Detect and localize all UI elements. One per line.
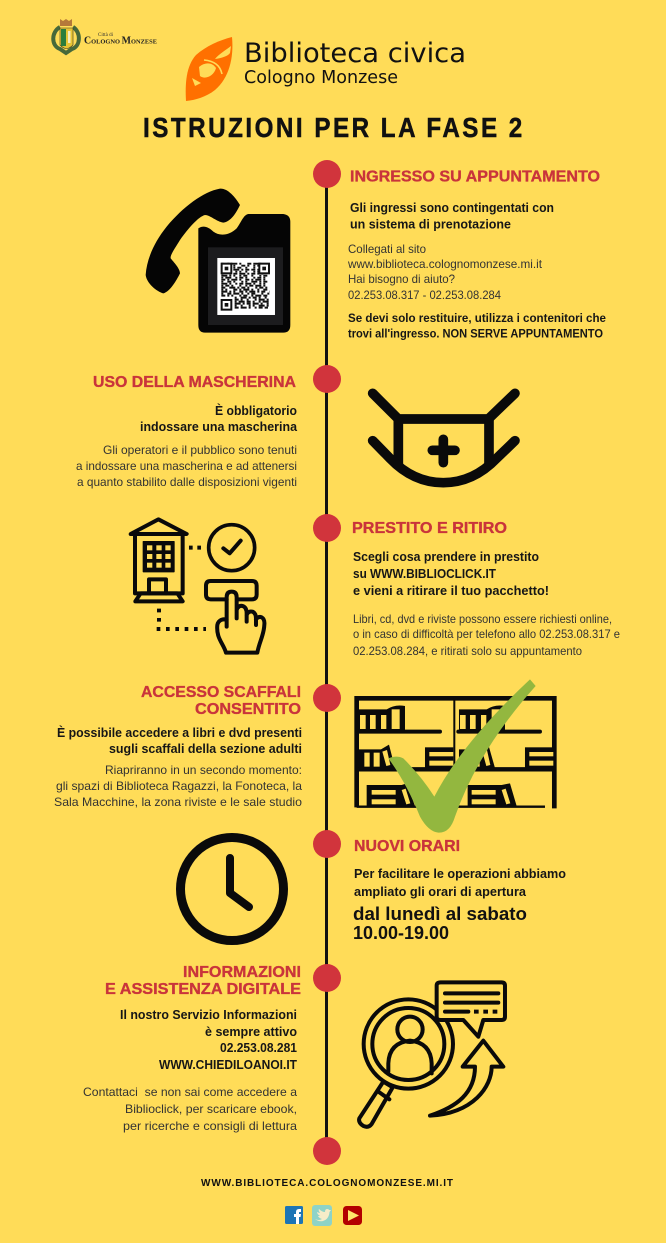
contacts: 02.253.08.317 - 02.253.08.284: [348, 288, 501, 302]
library location: Cologno Monzese: [244, 67, 398, 88]
contacts: Collegati al sito: [348, 242, 426, 256]
icon: orange leaf: [186, 37, 232, 101]
icon: youtube: [343, 1206, 362, 1225]
heading: ACCESSO SCAFFALI: [141, 684, 301, 701]
lead text: ampliato gli orari di apertura: [354, 885, 527, 899]
lead text: sugli scaffali della sezione adulti: [109, 742, 302, 756]
panel: informazioni e assistenza digitale: [83, 964, 301, 1133]
return note: [348, 313, 606, 340]
body text: 02.253.08.284, e ritirati solo su appuntamento: [353, 644, 582, 658]
icon: clock: [180, 838, 284, 940]
body text: [353, 612, 620, 658]
icon: face mask: [373, 393, 515, 483]
lead text: e vieni a ritirare il tuo pacchetto!: [353, 584, 549, 598]
body text: a indossare una mascherina e ad attenersi: [76, 459, 297, 473]
timeline: [313, 160, 341, 1165]
heading: PRESTITO E RITIRO: [352, 520, 507, 537]
lead text: [353, 550, 549, 598]
opening hours: [353, 904, 527, 943]
opening hours: 10.00-19.00: [353, 923, 449, 943]
body text: a quanto stabilito dalle disposizioni vigenti: [77, 475, 297, 489]
body text: Contattaci se non sai come accedere a: [83, 1085, 297, 1099]
body text: Riapriranno in un secondo momento:: [105, 763, 302, 777]
return note: trovi all'ingresso. NON SERVE APPUNTAMENTO: [348, 328, 603, 340]
contacts: www.biblioteca.colognomonzese.mi.it: [347, 257, 543, 271]
logo: Città di Cologno Monzese: [53, 19, 157, 53]
lead text: 02.253.08.281: [220, 1041, 297, 1055]
municipality name: Città di: [98, 33, 114, 38]
contacts: Hai bisogno di aiuto?: [348, 272, 455, 286]
lead text: WWW.CHIEDILOANOI.IT: [159, 1058, 297, 1072]
icon: facebook: [285, 1206, 303, 1224]
panel: uso della mascherina: [76, 374, 298, 489]
body text: [83, 1085, 297, 1133]
heading: INFORMAZIONI: [183, 964, 301, 981]
opening hours: dal lunedì al sabato: [353, 904, 527, 924]
lead text: su WWW.BIBLIOCLICK.IT: [353, 567, 496, 581]
bookshelf: [357, 698, 554, 808]
icon: telephone with QR code: [146, 189, 290, 333]
footer website: WWW.BIBLIOTECA.COLOGNOMONZESE.MI.IT: [201, 1178, 453, 1189]
lead text: Per facilitare le operazioni abbiamo: [354, 867, 566, 881]
lead text: [120, 1008, 297, 1072]
heading: [141, 684, 301, 718]
panel: ingresso su appuntamento: [347, 168, 606, 340]
body text: o in caso di difficoltà per telefono allo 02.253.08.317 e: [353, 627, 620, 641]
QR finders: [222, 264, 269, 310]
heading: E ASSISTENZA DIGITALE: [105, 981, 301, 998]
title: ISTRUZIONI PER LA FASE 2: [143, 114, 522, 143]
lead text: È obbligatorio: [215, 403, 297, 418]
lead text: È possibile accedere a libri e dvd presenti: [57, 725, 302, 740]
lead text: [140, 403, 298, 434]
lead text: [350, 201, 554, 232]
body text: Gli operatori e il pubblico sono tenuti: [103, 443, 297, 457]
lead text: è sempre attivo: [205, 1025, 297, 1039]
heading: CONSENTITO: [195, 701, 301, 718]
body text: per ricerche e consigli di lettura: [123, 1119, 297, 1133]
body text: [54, 763, 302, 809]
library name: Biblioteca civica: [244, 38, 466, 69]
icon: magnifier, person, speech bubble and arrow: [359, 982, 505, 1127]
panel: accesso scaffali consentito: [54, 684, 302, 809]
logo: Biblioteca civica: [186, 37, 466, 101]
icon: twitter: [312, 1205, 332, 1226]
lead text: Scegli cosa prendere in prestito: [353, 550, 539, 564]
return note: Se devi solo restituire, utilizza i contenitori che: [348, 313, 606, 325]
contacts: [347, 242, 543, 302]
lead text: indossare una mascherina: [140, 420, 298, 434]
lead text: Gli ingressi sono contingentati con: [350, 201, 554, 215]
green check: [388, 679, 536, 833]
lead text: [57, 725, 302, 756]
icon: library, check and tap: [131, 519, 264, 653]
heading: [105, 964, 301, 998]
heading: INGRESSO SU APPUNTAMENTO: [350, 168, 600, 186]
body text: Sala Macchine, la zona riviste e le sale studio: [54, 795, 302, 809]
body text: Biblioclick, per scaricare ebook,: [125, 1102, 297, 1116]
body text: Libri, cd, dvd e riviste possono essere richiesti online,: [353, 612, 612, 626]
icon: municipal crest: [53, 19, 79, 53]
lead text: Il nostro Servizio Informazioni: [120, 1008, 297, 1022]
heading: USO DELLA MASCHERINA: [93, 374, 296, 391]
body text: gli spazi di Biblioteca Ragazzi, la Fonoteca, la: [56, 779, 302, 793]
municipality name: COLOGNO MONZESE: [84, 36, 157, 46]
social icons: [285, 1205, 362, 1226]
lead text: un sistema di prenotazione: [350, 218, 511, 232]
lead text: [354, 867, 566, 899]
panel: nuovi orari: [353, 838, 566, 943]
heading: NUOVI ORARI: [354, 838, 460, 855]
icon: bookshelf with green check: [357, 679, 554, 833]
QR code: [221, 264, 270, 308]
body text: [76, 443, 297, 489]
panel: prestito e ritiro: [352, 520, 620, 658]
